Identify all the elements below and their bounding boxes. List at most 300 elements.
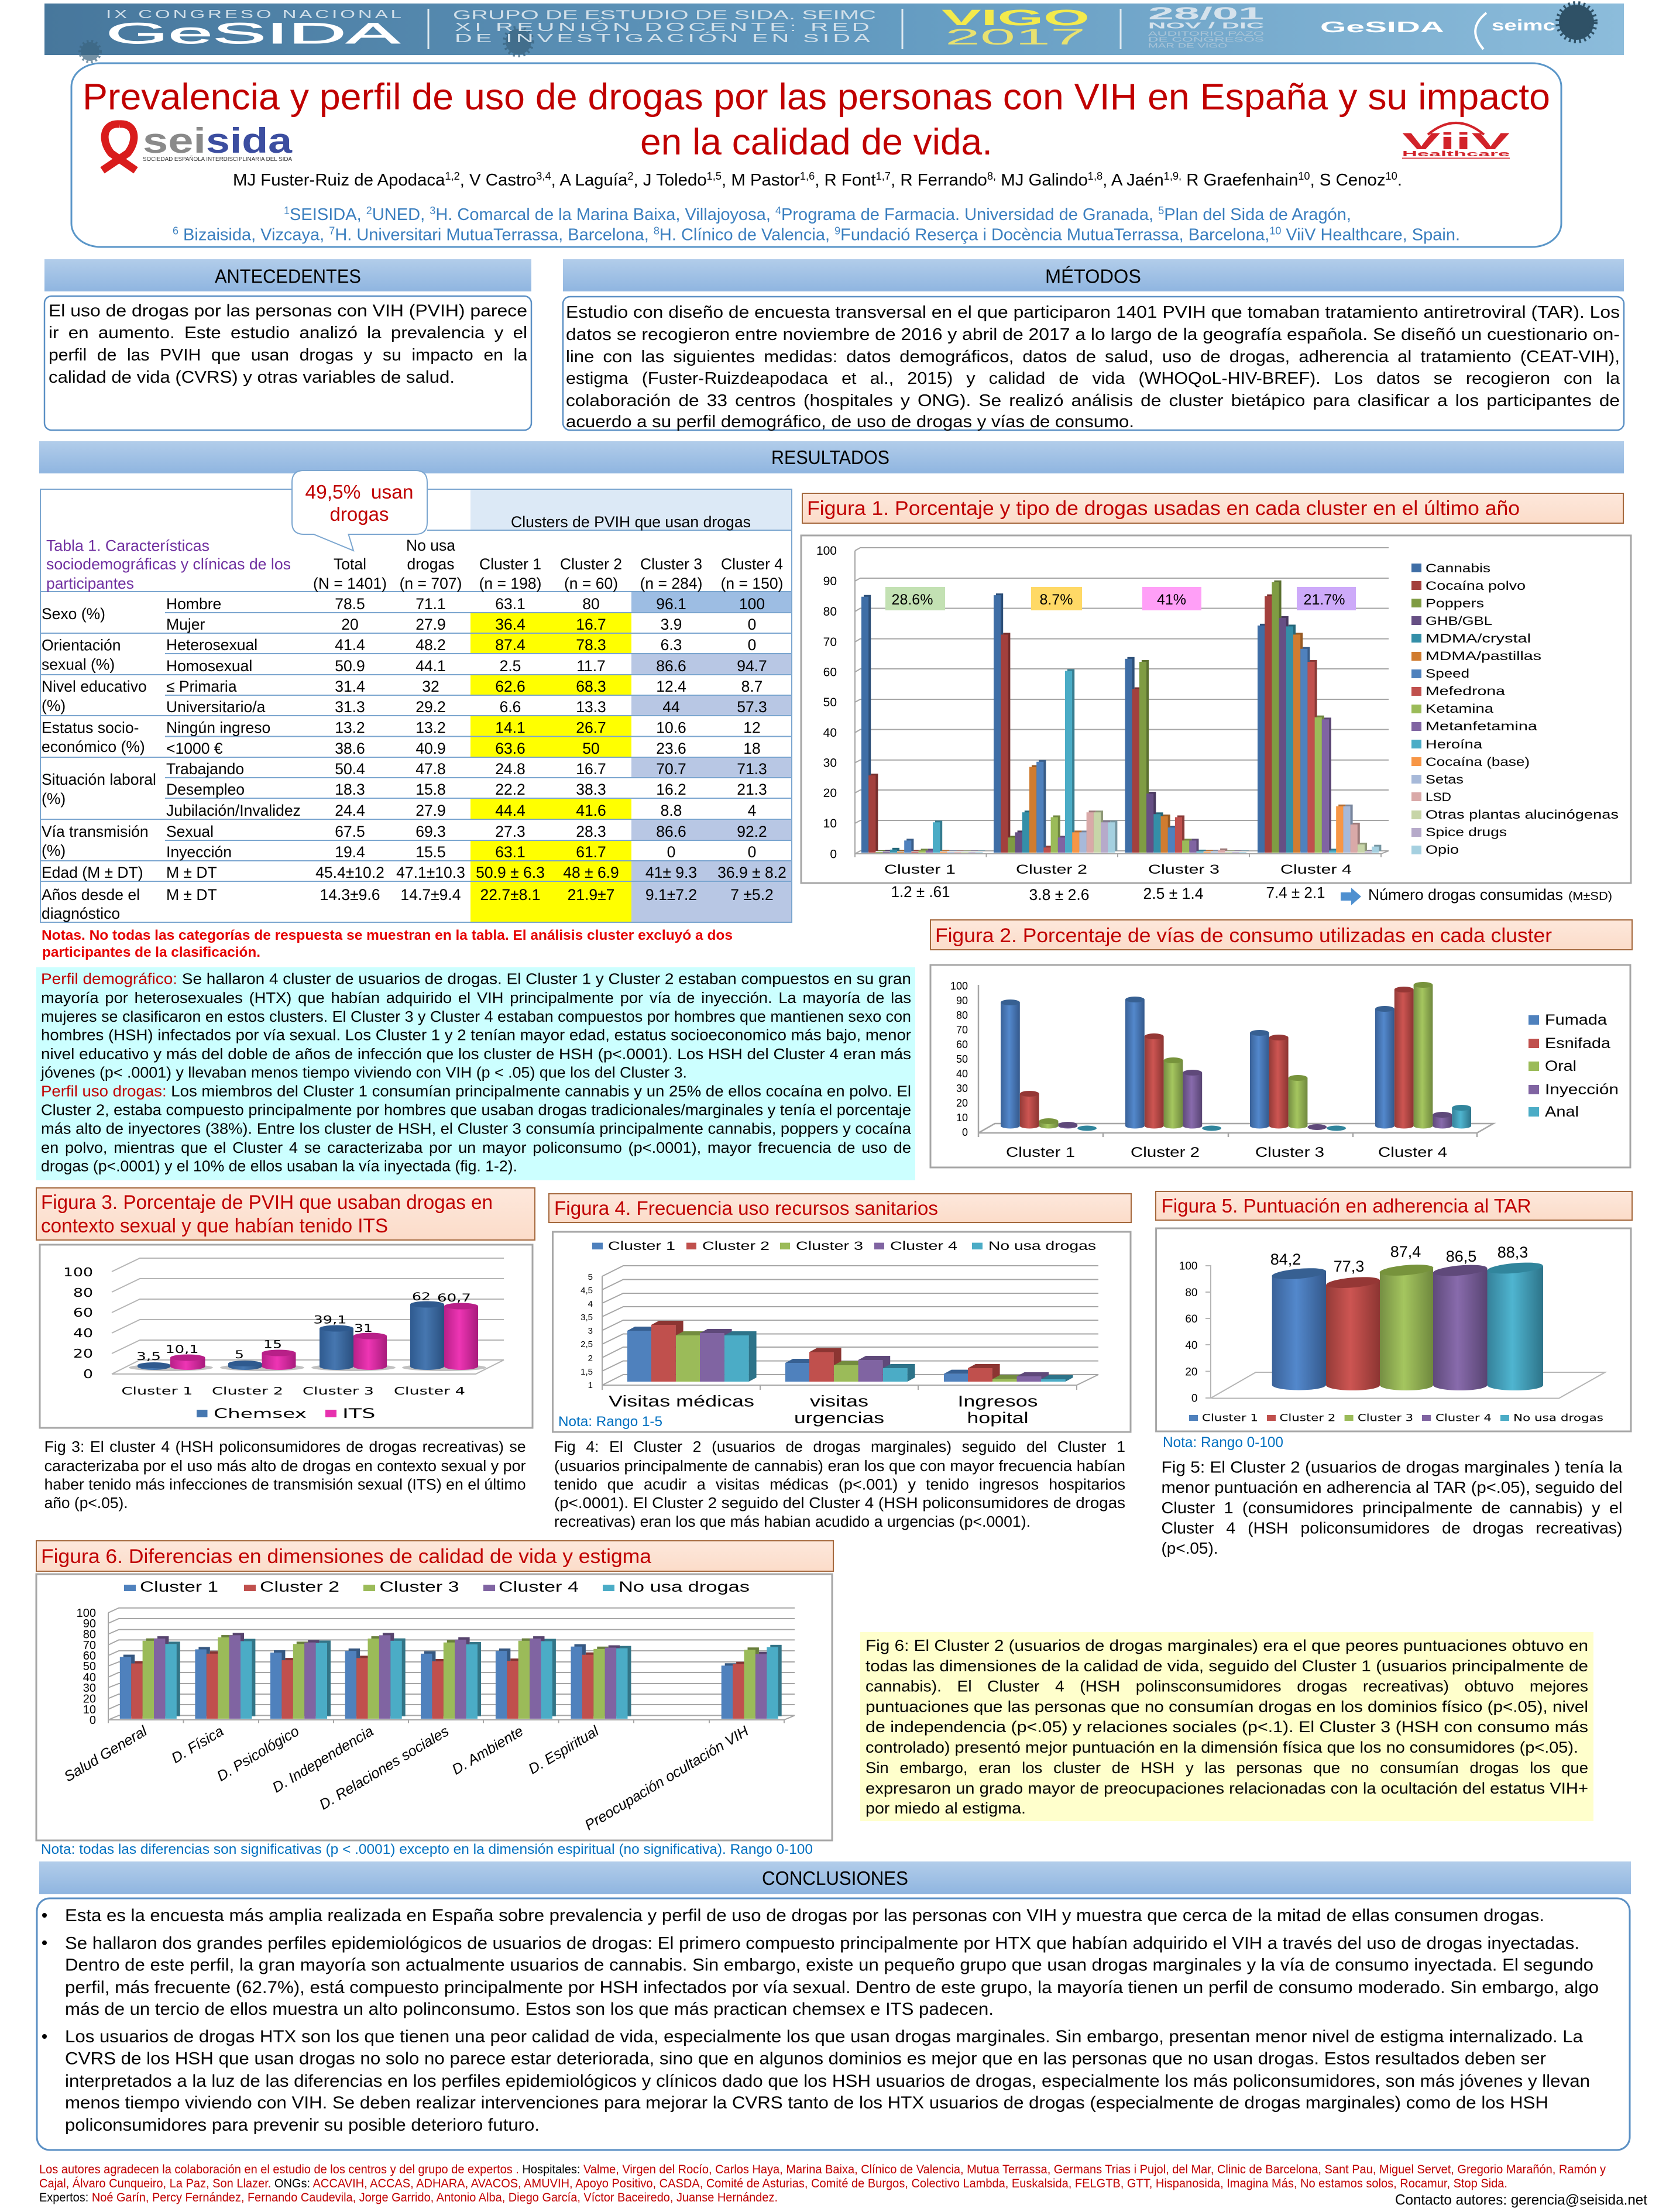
panel: antecedentes text: perfil de las PVIH que usan drogas y su impacto en la [49,346,528,365]
table values: 41.6 [576,802,606,819]
legend: vías: Fumada [1545,1012,1607,1028]
y axis labels: 10 [823,817,837,830]
logo: ViiV Healthcare: Healthcare [1402,149,1510,158]
percentage tag: 21.7% [1297,587,1356,610]
legend: Cluster 3 [1358,1413,1413,1424]
y axis labels: 100 [1179,1260,1197,1272]
heading: figura 4 [549,1194,1131,1222]
table values: 20 [341,616,359,633]
legend: Cluster 4 [890,1239,957,1253]
x axis labels: Ingresos [957,1393,1038,1410]
table row labels: categories: (%) [42,697,66,715]
y axis labels: 40 [73,1326,93,1340]
rotated category labels: Salud General [61,1722,150,1785]
y axis labels: 0 [830,847,837,861]
y axis labels: 70 [956,1024,968,1036]
table row labels: categories: Situación laboral [42,771,156,788]
banner: congreso GeSIDA [44,4,1624,61]
panel: antecedentes text: El uso de drogas por las personas con VIH (PVIH) parece [49,302,527,321]
y axis labels: 2,5 [581,1339,593,1349]
table column headers: (n = 707) [400,575,462,592]
cylinders: cluster 1 [1001,999,1097,1131]
cylinder: cluster 1 [1272,1266,1327,1390]
banner text: fechas y lugar: DE CONGRESOS [1148,36,1264,43]
legend: Cluster 4 [499,1579,579,1595]
bars depth [864,581,1381,851]
percentage tag: 28.6% [885,587,945,610]
legend: vías: Esnifada [1545,1035,1610,1052]
caption: fig 4 [554,1439,1125,1530]
caption: fig 5: Fig 5: El Cluster 2 (usuarios de drogas marginales ) tenía la [1161,1458,1623,1476]
table values: 63.6 [495,740,525,757]
table values: 16.7 [576,760,606,778]
acknowledgements: Los autores agradecen la colaboración en el estudio de los centros y del grupo de expertos . Hospitales: Valme, Virgen del Rocío, Carlos Haya, Marina Baixa, Clínico de Valencia, Mutua Terrassa, Germans Trias i Pujol, del Mar, Clinic de Barcelona, Sant Pau, Miguel Servet, Gregorio Marañón, Ramón y [39,2163,1606,2176]
heading: conclusiones [39,1861,1631,1894]
affiliations: 6 Bizaisida, Vizcaya, 7H. Universitari MutuaTerrassa, Barcelona, 8H. Clínico de Valencia, 9Fundació Reserça i Docència MutuaTerrassa, Barcelona,10 ViiV Healthcare, Spain. [173,225,1460,245]
caption: fig 5: menor puntuación en adherencia al TAR (p<.05), seguido del [1161,1478,1622,1496]
legend [1189,1413,1603,1424]
y axis labels: 60 [823,666,837,679]
bars: 17 drogas por 4 clusters [861,582,1379,853]
bullet 3: CVRS de los HSH que usan drogas no solo no parece estar deteriorada, sino que en algunos dominios es mejor que en las personas que no usan drogas. Estos resultados deben ser [65,2049,1546,2068]
data labels: 86,5 [1446,1248,1476,1265]
legend: drogas: Speed [1426,667,1469,681]
table column headers: (N = 1401) [313,575,387,592]
table row labels: subcategories: Jubilación/Invalidez [166,802,301,819]
data labels: 88,3 [1497,1244,1528,1261]
y axis labels: 80 [83,1628,96,1641]
table values: 4 [748,802,756,819]
table values: 63.1 [495,595,525,613]
callout: 49,5% usan drogas: 49,5% usan [305,481,413,503]
y axis labels: 90 [956,995,968,1007]
acknowledgements: Expertos: Noé Garín, Percy Fernández, Fernando Caudevila, Jorge Garrido, Antonio Alba, Diego García, Víctor Baceiredo, Juanse Hernández. [39,2191,778,2204]
legend: drogas: LSD [1426,791,1451,804]
caption: fig 4: Fig 4: El Cluster 2 (usuarios de drogas marginales) seguido del Cluster 1 [554,1439,1125,1455]
heading: métodos [563,259,1624,291]
callout: 49,5% usan drogas [292,470,427,551]
y axis labels: 100 [77,1607,96,1620]
note: rango 0-100: Nota: Rango 0-100 [1163,1434,1283,1451]
rotated category labels: D. Ambiente [449,1723,526,1778]
data labels [1270,1243,1528,1275]
table values: 22.7±8.1 [480,886,540,904]
y axis labels [1179,1260,1197,1405]
note: rango 1-5: Nota: Rango 1-5 [558,1414,662,1430]
table values: 10.6 [656,719,686,736]
table column headers: Cluster 1 [479,555,541,573]
table values: 86.6 [656,823,686,840]
y axis labels: 5 [588,1272,593,1282]
cylinder: cluster 3 [1379,1263,1434,1390]
legend: vías [1529,1012,1619,1120]
bullet 3: policonsumidores para prevenir su posible deterioro futuro. [65,2115,540,2135]
table row labels: subcategories: Ningún ingreso [166,719,270,736]
banner text: GeSIDA: IX CONGRESO NACIONAL [106,8,404,21]
table values: 27.3 [495,823,525,840]
y axis labels: 3 [588,1326,593,1336]
legend: drogas [1411,562,1619,857]
legend: Cluster 2 [1279,1413,1335,1424]
y axis labels: 80 [1185,1287,1197,1299]
table values: 44 [662,698,680,716]
table values: 0 [748,636,756,654]
data labels: 3,5 [136,1350,161,1363]
y axis labels [950,980,968,1138]
panel: perfil demográfico y uso de drogas: mujeres se clasificaron en estos clusters. El Cluster 3 y Cluster 4 estaban compuestos por hombres que mantienen sexo con [41,1009,911,1025]
y axis labels: 100 [816,544,837,558]
number of drugs row: 2.5 ± 1.4 [1143,885,1203,902]
caption: fig 3: año (p<.05). [44,1495,128,1512]
table values: 69.3 [415,823,446,840]
cylinders: cluster 4 [1375,982,1471,1128]
y axis labels: 30 [83,1682,96,1695]
caption: fig 5 [1161,1458,1623,1557]
icon: virus decorations [81,5,1594,61]
data labels: 87,4 [1390,1243,1421,1260]
data labels: 39,1 [314,1313,346,1326]
table values: 100 [739,595,765,613]
table column headers: drogas [407,555,455,573]
panel: perfil demográfico y uso de drogas: drogas (p<.0001) y el 10% de ellos usaban la vía inyectada (fig. 1-2). [41,1159,517,1175]
table row labels: categories [42,605,156,922]
caption: fig 3 [44,1439,526,1512]
legend: drogas: Poppers [1426,597,1484,610]
table values: 41.4 [335,636,365,654]
table values: 96.1 [656,595,686,613]
panel: fig 6 caption: controlado) presentó mejor puntuación en la dimensión física que los no consumidores (p<.05). [865,1739,1578,1756]
panel: perfil demográfico y uso de drogas: jóvenes (p< .0001) y llevaban menos tiempo viviendo con VIH (p < .05) que los del Cluster 3. [40,1065,687,1081]
heading: figura 1: Figura 1. Porcentaje y tipo de drogas usadas en cada cluster en el último año [807,497,1520,520]
legend: drogas: Otras plantas alucinógenas [1426,808,1619,822]
legend: Cluster 4 [1435,1413,1492,1424]
logo: ViiV Healthcare [1402,123,1510,159]
table values: 26.7 [576,719,606,736]
table values: 44.4 [495,802,525,819]
y axis labels: 80 [73,1286,93,1300]
table row labels: subcategories: Desempleo [166,781,245,798]
panel: perfil demográfico y uso de drogas: Cluster 2, estaba compuesto principalmente por hombres que usaban drogas tradicionales/marginales y tenía el porcentaje [41,1102,911,1119]
title: en la calidad de vida. [640,122,992,163]
y axis labels: 1,5 [581,1367,593,1377]
legend: drogas: Spice drugs [1426,826,1507,839]
table values: 15.5 [415,843,446,861]
panel: fig 6 caption: por miedo al estigma. [865,1799,1026,1817]
table column headers: (n = 284) [640,575,702,592]
legend: drogas: Opio [1426,843,1459,857]
x axis labels: hopital [967,1409,1029,1427]
banner text: grupo de estudio: GRUPO DE ESTUDIO DE SIDA. SEIMC [453,8,876,22]
table title [46,537,291,592]
caption: fig 5: (p<.05). [1161,1539,1218,1557]
caption: fig 4: tenido que acudir a visitas médicas (p<.001) y tenido ingresos hospitarios [554,1477,1125,1493]
table column headers [313,513,783,592]
table column headers: Cluster 2 [560,555,622,573]
x axis labels: Cluster 1 [122,1385,193,1397]
banner text: fechas y lugar [1148,4,1265,50]
panel: perfil demográfico y uso de drogas: Perfil uso drogas: Los miembros del Cluster 1 consumían principalmente cannabis y un 25% de ellos cocaína en polvo. El [41,1084,911,1100]
panel: title block [71,63,1561,247]
x axis labels: Cluster 2 [1016,862,1087,877]
panel: perfil demográfico y uso de drogas: en polvo, mientras que el Cluster 4 se caracterizaba por un mayor policonsumo (p<.0001), mayor frecuencia de uso de [41,1140,911,1156]
affiliations: 1SEISIDA, 2UNED, 3H. Comarcal de la Marina Baixa, Villajoyosa, 4Programa de Farmacia. Universidad de Granada, 5Plan del Sida de Aragón, [284,205,1351,224]
y axis labels: 40 [823,726,837,740]
table values: 14.1 [495,719,525,736]
logo: seisida [102,121,293,170]
legend: vías: Oral [1545,1058,1576,1074]
banner text: fechas y lugar: AUDITORIO PAZO [1148,30,1265,37]
banner text: GeSIDA: GeSIDA [106,17,401,50]
table row labels: categories: Sexo (%) [42,605,105,623]
legend: drogas: Cannabis [1426,562,1490,575]
title: Prevalencia y perfil de uso de drogas por las personas con VIH en España y su impacto [83,77,1550,118]
data labels: 60,7 [437,1292,471,1304]
table values: 61.7 [576,843,606,861]
banner text: Vigo 2017: VIGO [942,6,1090,30]
x axis labels: Cluster 3 [1255,1145,1324,1160]
table values: 50 [582,740,600,757]
table values: 36.9 ± 8.2 [717,864,786,881]
bullet 3: interpretados a la luz de las diferencias en los perfiles epidemiológicos y clínicos dado que los HSH usuarios de drogas, especialmente los más policonsumidores, son más jóvenes y llevan [65,2072,1590,2091]
table values: 78.3 [576,636,606,654]
x axis labels: Cluster 3 [303,1385,374,1397]
table row labels: categories: diagnóstico [42,905,120,922]
y axis labels: 2 [588,1354,593,1363]
table row labels: subcategories: Hombre [166,595,221,613]
table column headers: Total [334,555,366,573]
cylinder: no usa drogas [1487,1260,1543,1390]
y axis labels: 30 [823,756,837,770]
x axis labels: Cluster 2 [1131,1145,1200,1160]
legend: vías: Anal [1545,1104,1579,1120]
caption: fig 5: Cluster 1 (consumidores principalmente de cannabis) y el [1161,1499,1622,1517]
table row labels: subcategories: Inyección [166,843,232,861]
table values: 92.2 [737,823,767,840]
logo: ViiV Healthcare: ViiV [1402,129,1510,154]
bars: ingresos hospital [944,1364,1073,1382]
table notes: participantes de la clasificación. [42,944,260,960]
table values: 13.2 [415,719,446,736]
x axis labels: Cluster 2 [212,1385,283,1397]
panel: fig 6 caption: todas las dimensiones de la calidad de vida, seguido del Cluster 1 (usuarios principalmente de [865,1657,1588,1675]
data labels: 84,2 [1270,1251,1301,1268]
data labels: 31 [354,1322,373,1335]
table values: 71.3 [737,760,767,778]
affiliations [173,205,1460,245]
logo: seisida: SOCIEDAD ESPAÑOLA INTERDISCIPLINARIA DEL SIDA [143,155,292,163]
table row labels: categories: económico (%) [42,738,145,755]
heading: figura 5 [1156,1191,1632,1220]
table row labels: categories: Edad (M ± DT) [42,864,143,881]
table values: 50.4 [335,760,365,778]
cylinders: chemsex [138,1301,444,1370]
heading: figura 3: Figura 3. Porcentaje de PVIH que usaban drogas en [41,1191,493,1214]
y axis labels: 60 [1185,1313,1197,1325]
bars depth [123,1633,782,1716]
table values: 22.2 [495,781,525,798]
contact: Contacto autores: gerencia@seisida.net [1395,2192,1647,2208]
data labels: 62 [412,1290,431,1303]
panel: métodos text: colaboración de 33 centros (hospitales y ONG). Se realizó análisis de cluster bietápico para clasificar a los participantes de [566,391,1620,410]
table values: 48 ± 6.9 [563,864,619,881]
x axis labels [1006,1145,1447,1160]
table values: 28.3 [576,823,606,840]
bullet 3 [42,2027,1590,2135]
table values: 2.5 [500,657,521,675]
table row labels: categories: Estatus socio- [42,719,139,736]
table values: 16.2 [656,781,686,798]
x axis labels: Cluster 4 [1280,862,1352,877]
cylinders: cluster 3 [1250,1030,1346,1131]
chart: figura 1 drogas por cluster [801,535,1631,883]
panel: fig 6 caption: de independencia (p<.05) y relaciones sociales (p<.1). El Cluster 3 (HSH con consumo más [865,1718,1588,1736]
table values: 3.9 [661,616,682,633]
table values: 44.1 [415,657,446,675]
bars: visitas médicas [627,1321,757,1382]
table row labels: subcategories: Universitario/a [166,698,266,716]
chart: figura 3 chemsex e ITS [40,1245,533,1428]
legend: Cluster 1 [140,1579,218,1595]
table values: 31.3 [335,698,365,716]
x axis labels [122,1385,465,1397]
cylinders: cluster 2 [1125,997,1221,1131]
rotated category labels: D. Física [169,1723,226,1767]
y axis labels: 80 [823,605,837,619]
table values: 18.3 [335,781,365,798]
table values: 29.2 [415,698,446,716]
y axis labels: 80 [956,1009,968,1021]
table values: 50.9 ± 6.3 [476,864,545,881]
table title: Tabla 1. Características [46,537,209,555]
panel: fig 6 caption: Sin embargo, eran los cluster de HSH y las personas que no consumían drogas los que [865,1759,1588,1777]
table values: 71.1 [415,595,446,613]
y axis labels: 40 [956,1068,968,1080]
chart: figura 6 calidad de vida [36,1574,832,1840]
banner text: grupo de estudio: XI REUNIÓN DOCENTE: RED [455,20,873,34]
caption: número drogas consumidas: Número drogas consumidas [1368,886,1563,904]
table column headers: Clusters de PVIH que usan drogas [511,513,751,531]
heading: resultados [39,441,1624,473]
legend: drogas: Cocaína polvo [1426,579,1526,593]
table values: 9.1±7.2 [645,886,697,904]
y axis labels: 60 [956,1039,968,1050]
table values: 38.3 [576,781,606,798]
bullet 3: Los usuarios de drogas HTX son los que tienen una peor calidad de vida, especialmente los que usan drogas marginales. Sin embargo, presentan menor nivel de estigma internalizado. La [65,2027,1583,2046]
y axis labels: 20 [956,1097,968,1109]
table values: 50.9 [335,657,365,675]
legend: chemsex, ITS: Chemsex [214,1407,307,1421]
legend: No usa drogas [1513,1413,1603,1424]
y axis labels: 3,5 [581,1313,593,1323]
panel: antecedentes text: ir en aumento. Este estudio analizó la prevalencia y el [49,324,527,342]
table column headers: (n = 198) [479,575,541,592]
chart: figura 2 vías de consumo [930,965,1630,1167]
caption: fig 4: (usuarios principalmente de cannabis) eran los que con mayor frecuencia habían [554,1458,1125,1475]
legend: vías: Inyección [1545,1081,1619,1098]
heading: resultados: RESULTADOS [771,446,889,468]
rotated category labels: D. Independencia [270,1723,376,1796]
y axis labels [581,1272,593,1390]
table row labels: subcategories: ≤ Primaria [166,678,237,695]
legend: drogas: Heroína [1426,738,1482,751]
bullet 2: perfil, más frecuente (62.7%), está compuesto principalmente por HSH infectados por vía sexual. Dentro de este grupo, la mayoría tienen un perfil de consumo moderado. Sin embargo, algo [65,1978,1599,1997]
heading: conclusiones: CONCLUSIONES [762,1867,908,1889]
y axis labels: 50 [823,696,837,709]
table values: 31.4 [335,678,365,695]
y axis labels: 10 [83,1703,96,1716]
number of drugs row [891,883,1612,905]
legend: No usa drogas [619,1579,750,1595]
caption: fig 5: Cluster 4 (HSH policonsumidores de drogas recreativas) [1161,1519,1622,1537]
x axis labels: Cluster 4 [394,1385,465,1397]
panel: antecedentes text: calidad de vida (CVRS) y otras variables de salud. [49,368,455,387]
heading: figura 1 [802,493,1623,523]
table values: 68.3 [576,678,606,695]
table values: 19.4 [335,843,365,861]
table values: 57.3 [737,698,767,716]
y axis labels: 70 [83,1639,96,1652]
legend: chemsex, ITS: ITS [342,1407,376,1421]
panel: métodos text [563,297,1624,431]
y axis labels [63,1265,93,1381]
acknowledgements: Cajal, Álvaro Cunqueiro, La Paz, Son Llazer. ONGs: ACCAVIH, ACCAS, ADHARA, AVACOS, AMUVIH, Apoyo Positivo, CASDA, Comité de Asturias, Comité de Burgos, Colectivo Lambda, Euskalsida, FELGTB, GTT, Hispanosida, Imagina Más, No estamos solos, Rocamur, Stop Sida. [39,2177,1507,2190]
number of drugs row: 7.4 ± 2.1 [1266,884,1325,901]
banner text: fechas y lugar: 28/01 [1148,4,1264,23]
chart: figura 4 recursos sanitarios [552,1232,1131,1432]
table values: 0 [748,616,756,633]
table row labels: categories: Orientación [42,637,121,654]
table values: 41± 9.3 [645,864,697,881]
caption: fig 3: haber tenido más infecciones de transmisión sexual (ITS) en el último [44,1477,526,1493]
x axis labels: Cluster 1 [884,862,956,877]
y axis labels: 20 [83,1692,96,1705]
table values: 47.8 [415,760,446,778]
bullet 2: Dentro de este perfil, la gran mayoría son actualmente usuarios de cannabis. Sin embargo, existe un pequeño grupo que usan drogas marginales y la vía de consumo inyectada. El segundo [65,1956,1593,1974]
panel: perfil demográfico y uso de drogas: mayoría por heterosexuales (HTX) que habían adquirido el VIH principalmente por vía de inyección. La mayoría de las [41,990,911,1007]
table values: 8.8 [661,802,682,819]
banner logos: GeSIDA y seimc [1320,13,1555,49]
table values: 12 [743,719,761,736]
heading: figura 6 [36,1541,833,1571]
table values: 36.4 [495,616,525,633]
heading: métodos: MÉTODOS [1045,266,1141,287]
table values: 86.6 [656,657,686,675]
panel: métodos text: line con las siguientes medidas: datos demográficos, datos de salud, uso de drogas, adherencia al tratamiento (CEAT-VIH), [566,348,1620,366]
cylinder: cluster 4 [1433,1263,1488,1390]
heading: figura 3: contexto sexual y que habían tenido ITS [41,1215,388,1237]
heading: figura 2 [930,920,1632,950]
table values: 27.9 [415,802,446,819]
banner text: Vigo 2017 [942,6,1090,50]
callout: 49,5% usan drogas: drogas [330,503,389,525]
data labels: 5 [235,1348,244,1361]
panel: perfil demográfico y uso de drogas: más alto de inyectores (38%). Entre los cluster de HSH, el Cluster 3 consumía principalmente cannabis, poppers y cocaína [41,1121,912,1138]
table row labels: categories: sexual (%) [42,655,115,673]
number of drugs row: 3.8 ± 2.6 [1029,886,1090,904]
banner text: grupo de estudio: DE INVESTIGACIÓN EN SIDA [455,32,874,45]
banner text: Vigo 2017: 2017 [945,25,1086,50]
y axis labels: 40 [1185,1339,1197,1352]
legend: chemsex, ITS [197,1407,376,1421]
caption: fig 3: Fig 3: El cluster 4 (HSH policonsumidores de drogas recreativas) se [44,1439,526,1455]
y axis labels [816,544,837,861]
note: fig 6 significance: Nota: todas las diferencias son significativas (p < .0001) excepto en la dimensión espiritual (no significativa). Rango 0-100 [41,1842,813,1857]
table values: 24.8 [495,760,525,778]
y axis labels: 20 [1185,1366,1197,1379]
legend: Cluster 3 [379,1579,459,1595]
data labels: 77,3 [1334,1258,1364,1275]
table column headers: No usa [406,537,455,554]
